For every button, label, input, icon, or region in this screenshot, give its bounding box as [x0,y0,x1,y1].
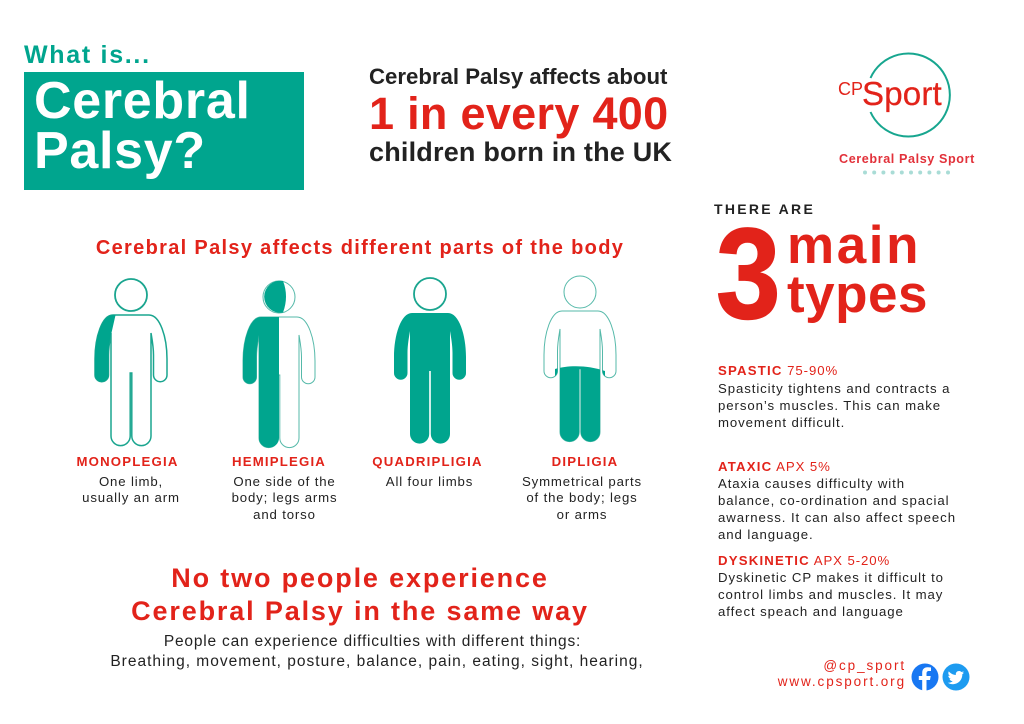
label: quadripligia: QUADRIPLIGIA [372,454,483,469]
label: monoplegia: One limb, [99,474,163,488]
title panel: Cerebral [34,72,251,130]
social handles [778,658,906,689]
big number 3: 3 [716,202,780,346]
figure: hemiplegia [243,281,315,448]
type: spastic [718,362,950,430]
type: ataxic: Ataxia causes difficulty with [718,476,905,491]
figure: quadriplegia [394,278,466,444]
social handles: @cp_sport [823,658,906,672]
type: spastic: Spasticity tightens and contracts a [718,381,950,396]
label: diplegia: Symmetrical parts [522,474,642,488]
type: dyskinetic: affect speach and language [718,604,904,619]
label: hemiplegia: HEMIPLEGIA [232,454,326,469]
type: dyskinetic [718,553,944,619]
text: difficulties [110,633,644,670]
label: diplegia: or arms [557,507,607,522]
type: spastic: SPASTIC 75-90% [718,362,838,378]
main types [787,216,928,324]
logo: CP Sport: CP [838,79,863,99]
label: monoplegia: MONOPLEGIA [76,454,179,469]
figure: monoplegia [95,279,167,446]
figure: diplegia [544,276,616,442]
heading: body parts: Cerebral Palsy affects different parts of the body [96,237,624,259]
icon: twitter [942,664,970,690]
type: dyskinetic: Dyskinetic CP makes it difficult to [718,570,944,585]
label: hemiplegia: body; legs arms [232,490,337,505]
callout: no two people [131,563,589,626]
logo: CP Sport [838,52,975,174]
statistic headline: children born in the UK [369,137,672,167]
social handles: www.cpsport.org [778,674,906,688]
title panel: Palsy? [34,122,206,180]
callout: no two people: No two people experience [171,563,549,593]
callout: no two people: Cerebral Palsy in the same way [131,596,589,626]
label: quadripligia [372,454,483,488]
type: ataxic: balance, co-ordination and spacial [718,493,949,508]
type: ataxic: and language. [718,527,814,542]
label: diplegia: of the body; legs [526,490,638,505]
label: hemiplegia: and torso [253,507,316,522]
label: monoplegia: usually an arm [82,490,180,505]
type: ataxic: ATAXIC APX 5% [718,459,831,474]
figures [94,276,616,448]
main types: main [787,216,921,275]
type: spastic: movement difficult. [718,415,845,430]
statistic headline: Cerebral Palsy affects about [369,64,667,89]
statistic headline: 1 in every 400 [369,88,668,139]
type: ataxic: awarness. It can also affect speech [718,510,956,525]
statistic headline [369,64,672,167]
logo: CP Sport: Cerebral Palsy Sport [839,152,975,166]
type: dyskinetic: DYSKINETIC APX 5-20% [718,553,890,568]
type: ataxic [718,459,956,542]
type: dyskinetic: control limbs and muscles. It may [718,587,943,602]
label: hemiplegia [232,454,337,522]
label: diplegia [522,454,642,522]
heading: there are: THERE ARE [714,201,815,217]
type: spastic: person’s muscles. This can make [718,398,941,413]
main types: types [787,265,928,324]
title panel [24,72,304,190]
label: monoplegia [76,454,180,505]
logo: CP Sport: Sport [862,75,942,112]
label: quadripligia: All four limbs [386,474,473,488]
heading: what is: What is... [24,41,151,69]
icon: facebook [912,664,938,690]
label: hemiplegia: One side of the [233,474,336,488]
text: difficulties: People can experience difficulties with different things: [164,633,581,650]
text: difficulties: Breathing, movement, posture, balance, pain, eating, sight, hearing, [110,652,644,670]
label: diplegia: DIPLIGIA [552,454,618,469]
